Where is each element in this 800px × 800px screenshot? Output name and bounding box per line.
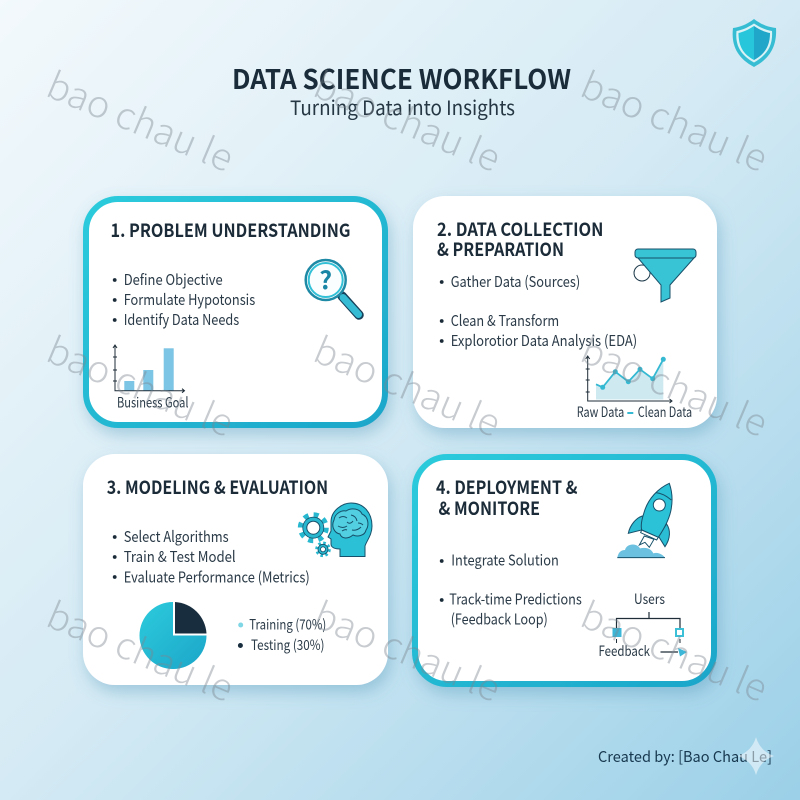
bullet list 1: Define Objective	[124, 269, 223, 290]
pie legend: Training (70%)	[249, 614, 326, 634]
heading 4: & MONITORE	[438, 495, 540, 521]
pie legend: Testing (30%)	[251, 635, 324, 655]
panel: modeling and evaluation	[83, 454, 388, 685]
line chart: raw to clean data: Raw Data	[577, 402, 624, 422]
panel: deployment and monitoring	[415, 457, 714, 684]
watermarks: bao chau le	[574, 585, 777, 712]
bullet list 2: Explorotior Data Analysis (EDA)	[451, 330, 637, 351]
decorative sparkle	[738, 737, 774, 775]
bullet list 4: Track-time Predictions	[449, 588, 582, 610]
panel: data collection and preparation	[413, 196, 717, 428]
subtitle: Turning Data into Insights	[290, 92, 515, 121]
watermarks	[40, 55, 777, 712]
bar chart: business goal: Business Goal	[117, 392, 189, 412]
heading 2: 2. DATA COLLECTION	[437, 216, 604, 242]
watermarks: bao chau le	[574, 55, 777, 182]
bullet list 2: Clean & Transform	[451, 310, 559, 331]
watermarks: bao chau le	[40, 55, 243, 182]
heading 2: & PREPARATION	[437, 236, 564, 262]
pie legend	[238, 614, 326, 655]
heading 1: 1. PROBLEM UNDERSTANDING	[110, 217, 350, 243]
bullet list 1: Identify Data Needs	[124, 309, 239, 330]
heading 4: 4. DEPLOYMENT &	[436, 474, 578, 500]
bullet list 4: (Feedback Loop)	[451, 608, 548, 630]
bullet list 2: Gather Data (Sources)	[451, 271, 580, 292]
watermarks: bao chau le	[307, 320, 510, 447]
icon: rocket	[617, 483, 672, 558]
line chart: raw to clean data: Clean Data	[638, 402, 692, 422]
icon: magnifier with question mark	[306, 260, 359, 315]
heading 4	[436, 474, 578, 521]
watermarks: bao chau le	[307, 55, 510, 182]
line chart: raw to clean data	[577, 356, 692, 422]
icon: funnel	[634, 249, 696, 302]
bullet list 3: Select Algorithms	[124, 526, 229, 547]
bullet list 4: Integrate Solution	[451, 550, 559, 570]
bullet list 3	[113, 526, 310, 588]
watermarks: bao chau le	[40, 320, 243, 447]
icon: shield	[733, 19, 776, 67]
bullet list 3: Train & Test Model	[124, 546, 236, 567]
icon: magnifier with question mark: ?	[319, 261, 332, 297]
bar chart: business goal	[113, 345, 189, 412]
credit: Created by: [Bao Chau Le]	[598, 746, 772, 767]
diagram: users feedback loop: Feedback	[598, 641, 650, 661]
bullet list 1	[113, 269, 255, 330]
diagram: users feedback loop	[598, 589, 687, 661]
watermarks: bao chau le	[40, 585, 243, 712]
watermarks: bao chau le	[307, 585, 510, 712]
pie chart: training vs testing	[139, 602, 206, 669]
icon: head with brain and gears	[300, 503, 372, 556]
bullet list 1: Formulate Hypotonsis	[124, 289, 255, 310]
diagram: users feedback loop: Users	[634, 589, 665, 609]
watermarks: bao chau le	[574, 320, 777, 447]
title: DATA SCIENCE WORKFLOW	[232, 58, 571, 97]
heading 2	[437, 216, 604, 262]
bullet list 4	[440, 550, 582, 630]
panel: problem understanding	[86, 199, 385, 425]
bullet list 3: Evaluate Performance (Metrics)	[124, 566, 310, 588]
bullet list 2	[440, 271, 637, 351]
heading 3: 3. MODELING & EVALUATION	[107, 474, 328, 500]
